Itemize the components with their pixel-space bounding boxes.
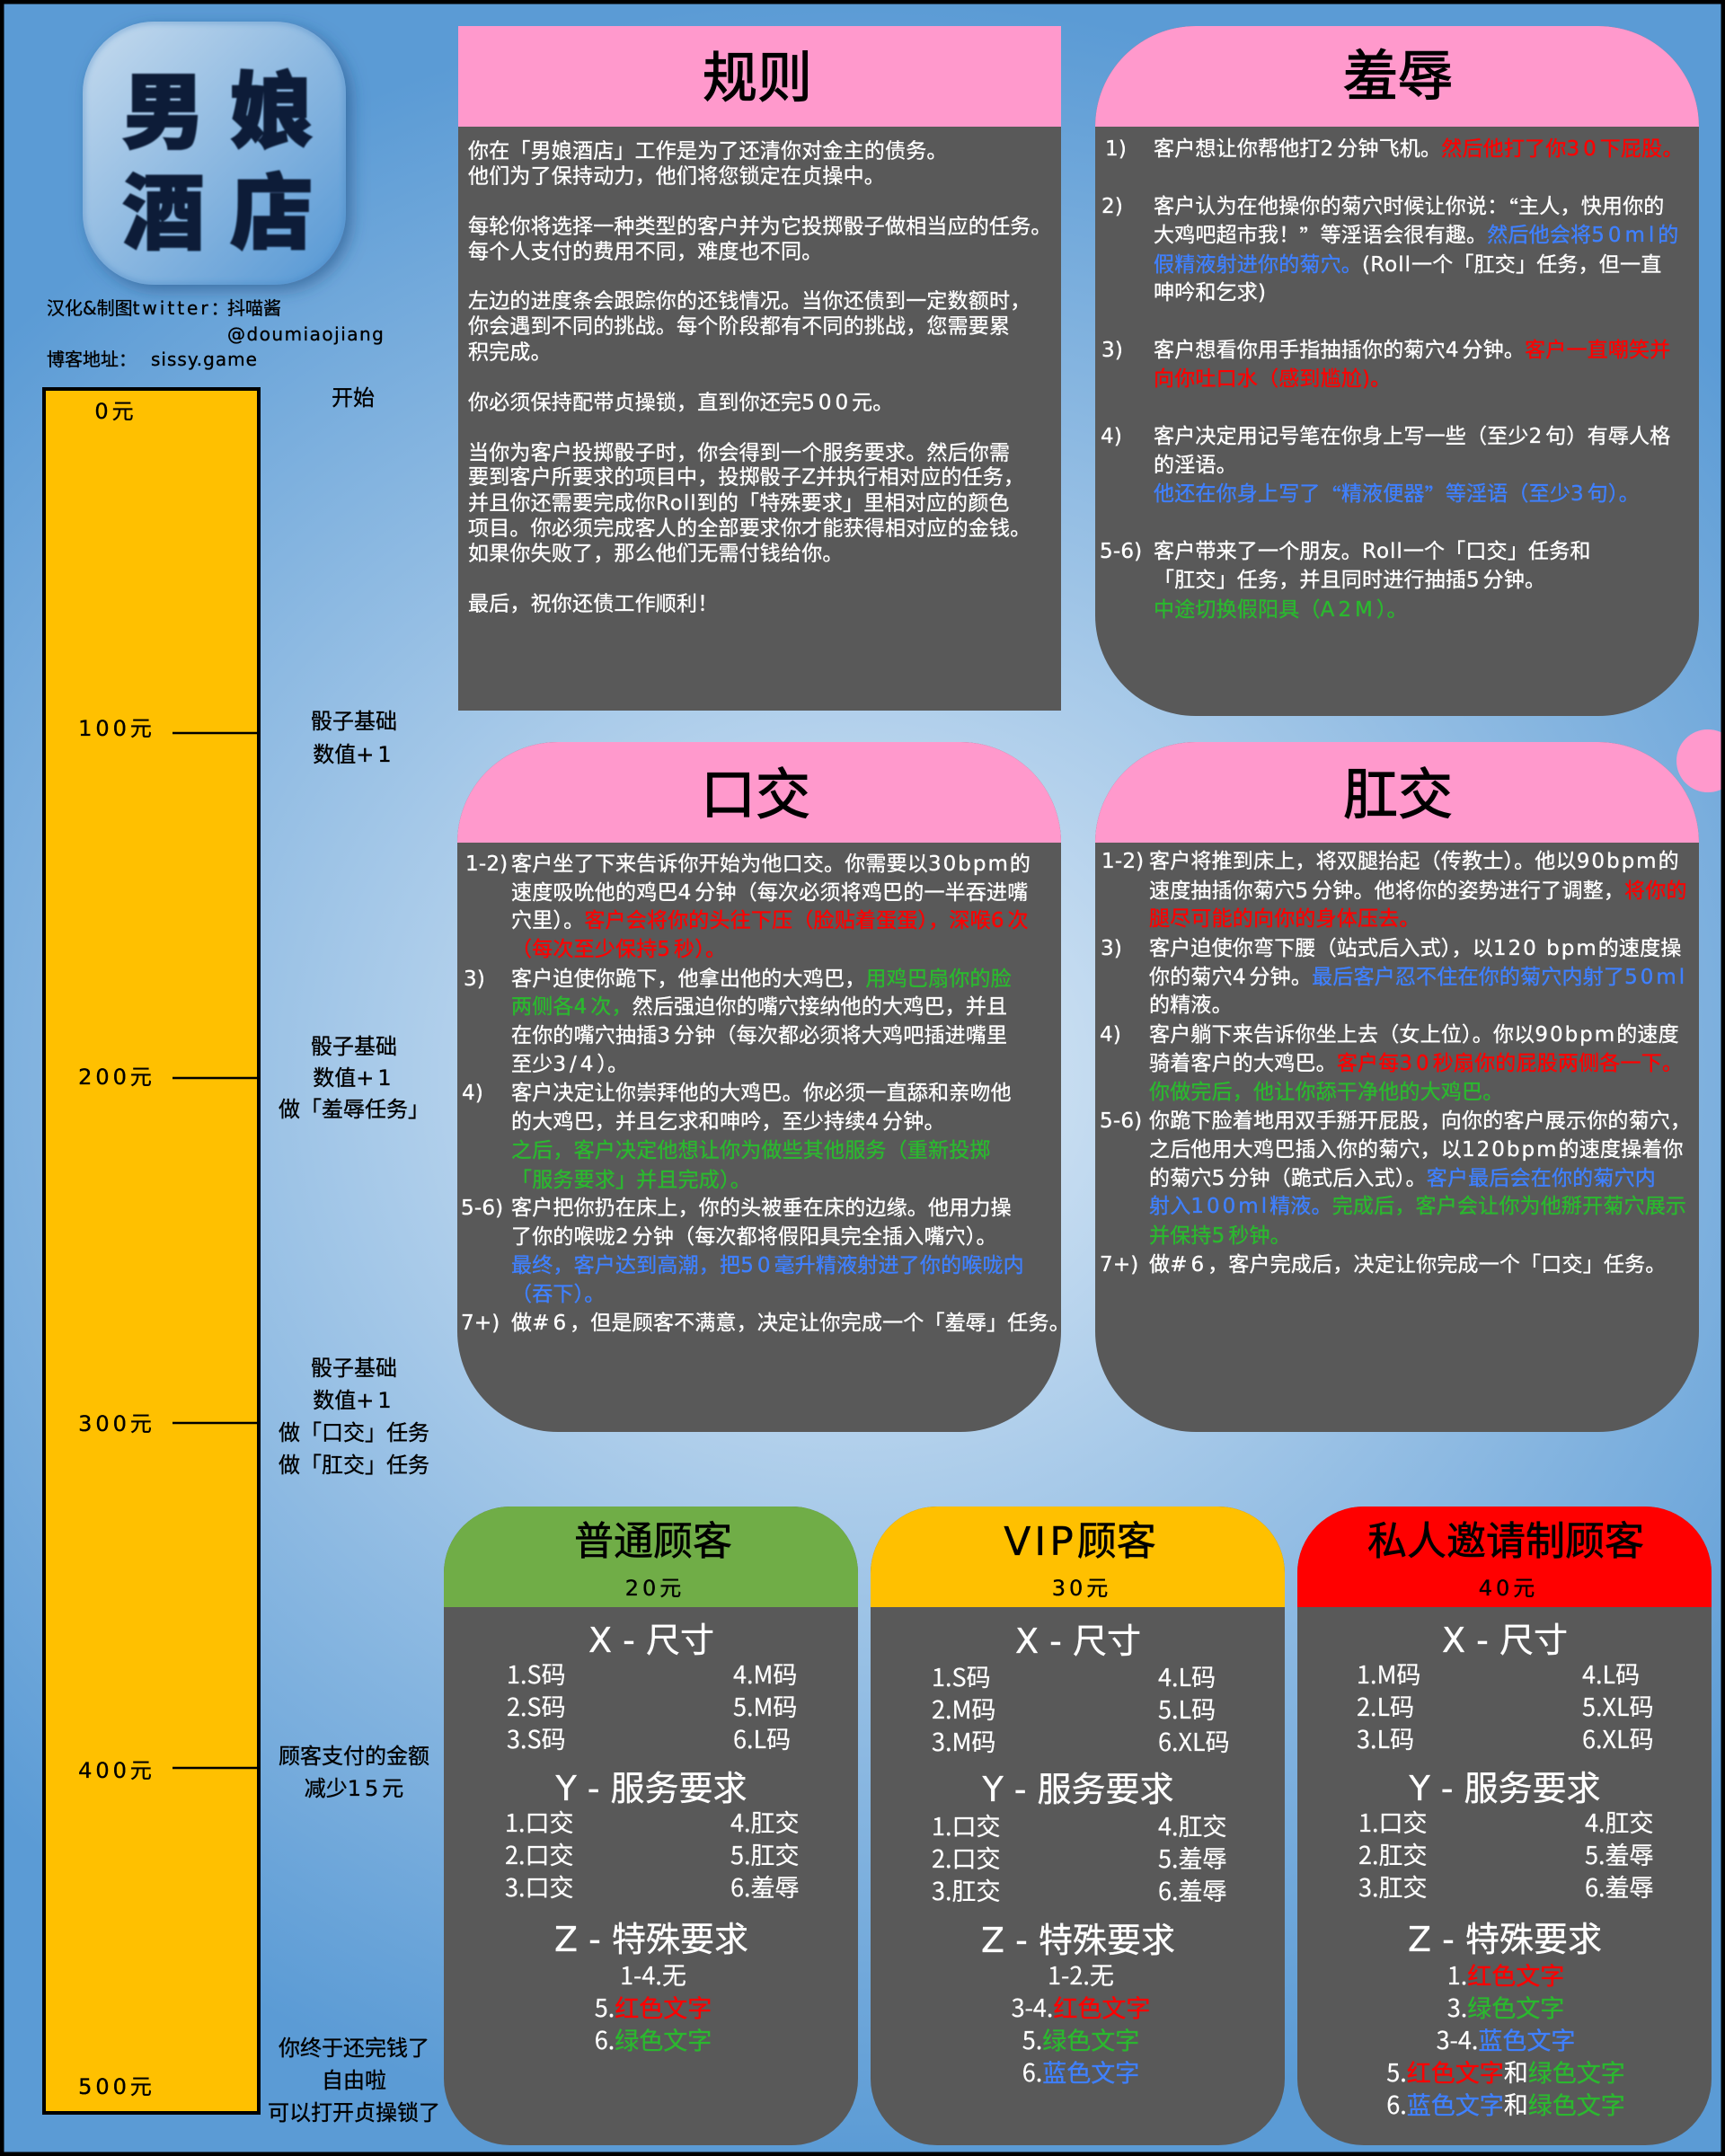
milestone: 300 [279, 1356, 429, 1478]
X size table: 4.L码 [1582, 1656, 1640, 1691]
X size table: 4.L码 [1158, 1658, 1216, 1693]
humiliation list: 假精液射进你的菊穴。(Roll一个「肛交」任务，但一直 [1154, 253, 1661, 277]
X size table: 5.L码 [1158, 1691, 1216, 1726]
credits: 汉化&制图twitter： [47, 297, 229, 319]
Y service table: 1.口交 [505, 1804, 573, 1839]
Y service table: 3.口交 [505, 1869, 573, 1904]
humiliation list: 客户想让你帮他打2分钟飞机。然后他打了你30下屁股。 [1154, 137, 1684, 161]
progress bar: 300元 [78, 1411, 152, 1436]
Y service table: 6.羞辱 [1158, 1872, 1227, 1907]
X size table: 2.S码 [507, 1688, 566, 1723]
anal list: 1-2) [1101, 850, 1144, 873]
X size table: 3.L码 [1357, 1720, 1414, 1755]
rules text: 并且你还需要完成你Roll到的「特殊要求」里相对应的颜色 [468, 492, 1010, 516]
milestone: 200 [279, 1034, 429, 1122]
X size table: 1.M码 [1357, 1656, 1420, 1691]
anal list: 做#6，客户完成后，决定让你完成一个「口交」任务。 [1149, 1253, 1667, 1277]
Z special table: 3-4.蓝色文字 [1437, 2021, 1575, 2056]
decorative pink circle [1676, 729, 1725, 792]
rules text: 每轮你将选择一种类型的客户并为它投掷骰子做相当应的任务。 [468, 216, 1052, 239]
progress bar: 200元 [78, 1065, 152, 1090]
X size table: X - 尺寸 [1442, 1621, 1568, 1660]
oral list: 最终，客户达到高潮，把50毫升精液射进了你的喉咙内 [511, 1254, 1024, 1277]
heading: private invitation customer: 私人邀请制顾客 [1367, 1518, 1644, 1565]
anal list: 客户将推到床上，将双腿抬起（传教士）。他以90bpm的 [1149, 850, 1679, 873]
milestone: 200: 做「羞辱任务」 [279, 1097, 429, 1122]
heading: anal: 肛交 [1343, 764, 1453, 826]
Y service table [932, 1770, 1227, 1907]
heading: regular customer: 普通顾客 [574, 1518, 732, 1565]
oral list: 3) [464, 968, 485, 991]
Y service table: 5.肛交 [730, 1836, 800, 1871]
panel: private invitation customer [1297, 1507, 1712, 2145]
oral list: 7+) [461, 1312, 500, 1335]
X size table: 6.XL码 [1158, 1723, 1230, 1758]
milestone: 500: 可以打开贞操锁了 [268, 2100, 440, 2125]
milestone: 500: 自由啦 [322, 2068, 386, 2093]
oral list: 客户迫使你跪下，他拿出他的大鸡巴，用鸡巴扇你的脸 [511, 967, 1012, 991]
oral list: 1-2) [465, 853, 508, 876]
humiliation list: 的淫语。 [1154, 454, 1237, 477]
price: 40: 40元 [1479, 1576, 1535, 1601]
logo: 男娘酒店: 店 [230, 147, 313, 266]
milestone: 500 [268, 2036, 440, 2125]
X size table: 3.M码 [932, 1723, 995, 1758]
rules text: 要到客户所要求的项目中，投掷骰子Z并执行相对应的任务， [468, 465, 1024, 489]
oral list: 的大鸡巴，并且乞求和呻吟，至少持续4分钟。 [511, 1110, 945, 1134]
Y service table: 2.口交 [505, 1836, 573, 1871]
rules text: 你必须保持配带贞操锁，直到你还完500元。 [468, 392, 894, 415]
X size table: 2.M码 [932, 1691, 995, 1726]
oral list: 5-6) [461, 1197, 503, 1220]
rules text: 每个人支付的费用不同，难度也不同。 [468, 241, 822, 264]
anal list: 骑着客户的大鸡巴。客户每30秒扇你的屁股两侧各一下。 [1149, 1052, 1683, 1075]
X size table: 5.M码 [733, 1688, 797, 1723]
anal list: 7+) [1100, 1253, 1138, 1277]
milestone: start: 开始 [332, 385, 375, 411]
anal list: 你做完后，他让你舔干净他的大鸡巴。 [1149, 1081, 1503, 1104]
price: 20: 20元 [625, 1576, 681, 1601]
oral list: （吞下）。 [511, 1283, 606, 1306]
humiliation list: 大鸡吧超市我！”等淫语会很有趣。然后他会将50ml的 [1154, 220, 1678, 251]
Y service table: 1.口交 [932, 1807, 1001, 1842]
heading: VIP customer: VIP顾客 [1004, 1518, 1156, 1565]
Z special table [1386, 1920, 1625, 2121]
Z special table [981, 1921, 1175, 2089]
anal list: 腿尽可能的向你的身体压去。 [1149, 907, 1420, 931]
milestone: 100 [311, 709, 397, 767]
panel: rules [458, 26, 1061, 711]
Z special table: 6.绿色文字 [595, 2021, 712, 2056]
anal list: 4) [1100, 1023, 1121, 1047]
Y service table: 4.肛交 [730, 1804, 800, 1839]
milestone: 300: 数值+1 [313, 1388, 395, 1413]
credits: 博客地址： [47, 349, 137, 370]
Y service table: 2.口交 [932, 1840, 1001, 1875]
humiliation list: 4) [1101, 425, 1122, 448]
logo: 男娘酒店: 娘 [230, 45, 313, 165]
Y service table [1358, 1769, 1653, 1904]
Z special table: 1.红色文字 [1447, 1957, 1564, 1992]
rules text: 左边的进度条会跟踪你的还钱情况。当你还债到一定数额时， [468, 289, 1031, 313]
anal list: 3) [1101, 937, 1122, 960]
humiliation list: 客户认为在他操你的菊穴时候让你说：“主人，快用你的 [1154, 191, 1665, 222]
logo: 男娘酒店: 男 [122, 47, 205, 165]
Z special table: 1-4.无 [620, 1957, 686, 1992]
progress bar: 0元 [94, 399, 134, 424]
rules text: 他们为了保持动力，他们将您锁定在贞操中。 [468, 165, 885, 189]
anal list: 之后他用大鸡巴插入你的菊穴，以120bpm的速度操着你 [1149, 1138, 1684, 1162]
Y service table: 4.肛交 [1158, 1807, 1227, 1842]
anal list: 的菊穴5分钟（跪式后入式）。客户最后会在你的菊穴内 [1149, 1167, 1656, 1190]
Z special table: 6.蓝色文字 [1022, 2054, 1139, 2089]
panel: oral [457, 742, 1070, 1432]
credits: @doumiaojiang [227, 323, 385, 345]
panel: humiliation [1095, 26, 1699, 716]
oral list: 做#6，但是顾客不满意，决定让你完成一个「羞辱」任务。 [511, 1312, 1070, 1335]
rules text: 最后，祝你还债工作顺利！ [468, 593, 718, 616]
humiliation list: 客户想看你用手指抽插你的菊穴4分钟。客户一直嘲笑并 [1154, 339, 1670, 362]
humiliation list: 向你吐口水（感到尴尬)。 [1154, 367, 1391, 391]
Y service table: 6.羞辱 [1585, 1869, 1653, 1904]
anal list: 并保持5秒钟。 [1149, 1224, 1291, 1248]
humiliation list: 呻吟和乞求) [1154, 281, 1266, 305]
Z special table: Z - 特殊要求 [554, 1920, 748, 1959]
credits [47, 297, 385, 370]
anal list [1100, 850, 1691, 1277]
Z special table: 5.红色文字和绿色文字 [1386, 2054, 1625, 2089]
Z special table: 5.绿色文字 [1022, 2021, 1139, 2056]
heading: humiliation: 羞辱 [1343, 45, 1453, 108]
Y service table: Y - 服务要求 [1408, 1769, 1601, 1808]
panel: regular customer [444, 1507, 858, 2145]
humiliation list: 客户带来了一个朋友。Roll一个「口交」任务和 [1154, 540, 1591, 563]
humiliation list: 2) [1101, 195, 1123, 218]
humiliation list: 中途切换假阳具（A2M）。 [1154, 598, 1408, 622]
logo: 男娘酒店: 酒 [122, 147, 205, 266]
oral list: 两侧各4次，然后强迫你的嘴穴接纳他的大鸡巴，并且 [511, 995, 1007, 1019]
oral list: 在你的嘴穴抽插3分钟（每次都必须将大鸡吧插进嘴里 [511, 1024, 1007, 1047]
milestone: 300: 做「肛交」任务 [279, 1453, 429, 1478]
Y service table [505, 1769, 800, 1904]
anal list: 5-6) [1100, 1109, 1142, 1133]
rules text: 积完成。 [468, 341, 552, 365]
rules text: 你在「男娘酒店」工作是为了还清你对金主的债务。 [468, 140, 948, 163]
price: 30: 30元 [1052, 1576, 1108, 1601]
credits: 抖喵酱 [227, 297, 281, 319]
oral list: 客户坐了下来告诉你开始为他口交。你需要以30bpm的 [511, 853, 1031, 876]
Z special table [554, 1920, 748, 2056]
rules text: 项目。你必须完成客人的全部要求你才能获得相对应的金钱。 [468, 517, 1031, 541]
Y service table: Y - 服务要求 [981, 1770, 1174, 1809]
milestone: 400 [279, 1744, 429, 1801]
oral list: 至少3/4）。 [511, 1053, 628, 1076]
oral list: 之后，客户决定他想让你为做些其他服务（重新投掷 [511, 1139, 991, 1162]
milestone: 400: 减少15元 [305, 1776, 403, 1801]
milestone: 200: 数值+1 [313, 1065, 395, 1091]
X size table: 1.S码 [932, 1658, 991, 1693]
rules text: 如果你失败了，那么他们无需付钱给你。 [468, 543, 844, 566]
oral list: 速度吸吮他的鸡巴4分钟（每次必须将鸡巴的一半吞进嘴 [511, 881, 1028, 905]
progress bar: 100元 [78, 716, 152, 741]
Z special table: Z - 特殊要求 [981, 1921, 1175, 1960]
progress bar: 400元 [78, 1758, 152, 1783]
Z special table: 3.绿色文字 [1447, 1989, 1564, 2024]
milestone: 200: 骰子基础 [311, 1034, 397, 1059]
Z special table: 5.红色文字 [595, 1989, 712, 2024]
Y service table: 6.羞辱 [730, 1869, 800, 1904]
Z special table: 3-4.红色文字 [1012, 1989, 1150, 2024]
humiliation list: 「肛交」任务，并且同时进行抽插5分钟。 [1154, 569, 1545, 592]
Y service table: 4.肛交 [1585, 1804, 1653, 1839]
rules text: 当你为客户投掷骰子时，你会得到一个服务要求。然后你需 [468, 442, 1010, 465]
Y service table: Y - 服务要求 [554, 1769, 748, 1808]
oral list: （每次至少保持5秒）。 [511, 938, 726, 961]
Z special table: 6.蓝色文字和绿色文字 [1386, 2086, 1625, 2121]
Y service table: 1.口交 [1358, 1804, 1427, 1839]
credits: sissy.game [151, 349, 258, 370]
Y service table: 3.肛交 [932, 1872, 1001, 1907]
progress bar [44, 389, 259, 2113]
X size table: X - 尺寸 [588, 1621, 714, 1660]
oral list: 4) [462, 1082, 483, 1105]
Y service table: 5.羞辱 [1158, 1840, 1227, 1875]
milestone: 300: 骰子基础 [311, 1356, 397, 1381]
oral list: 客户决定让你崇拜他的大鸡巴。你必须一直舔和亲吻他 [511, 1082, 1012, 1105]
X size table [1357, 1621, 1654, 1755]
oral list: 了你的喉咙2分钟（每次都将假阳具完全插入嘴穴）。 [511, 1225, 997, 1249]
humiliation list: 1) [1105, 137, 1127, 161]
oral list: 「服务要求」并且完成）。 [511, 1169, 751, 1192]
X size table: 6.XL码 [1582, 1720, 1654, 1755]
X size table: 6.L码 [733, 1720, 791, 1755]
milestone: 300: 做「口交」任务 [279, 1420, 429, 1445]
milestone: 500: 你终于还完钱了 [279, 2036, 429, 2061]
Z special table: Z - 特殊要求 [1408, 1920, 1602, 1959]
humiliation list: 客户决定用记号笔在你身上写一些（至少2句）有辱人格 [1154, 425, 1670, 448]
anal list: 射入100ml精液。完成后，客户会让你为他掰开菊穴展示 [1149, 1195, 1686, 1218]
anal list: 你的菊穴4分钟。最后客户忍不住在你的菊穴内射了50ml [1149, 966, 1687, 989]
X size table: 4.M码 [733, 1656, 797, 1691]
anal list: 客户迫使你弯下腰（站式后入式），以120 bpm的速度操 [1149, 937, 1682, 960]
oral list: 客户把你扔在床上，你的头被垂在床的边缘。他用力操 [511, 1197, 1012, 1220]
X size table: 1.S码 [507, 1656, 566, 1691]
Y service table: 3.肛交 [1358, 1869, 1427, 1904]
X size table: X - 尺寸 [1015, 1621, 1141, 1661]
humiliation list: 他还在你身上写了“精液便器”等淫语（至少3句）。 [1154, 479, 1640, 509]
X size table: 2.L码 [1357, 1688, 1414, 1723]
Y service table: 5.羞辱 [1585, 1836, 1653, 1871]
rules text [468, 140, 1052, 616]
Y service table: 2.肛交 [1358, 1836, 1427, 1871]
X size table: 5.XL码 [1582, 1688, 1654, 1723]
anal list: 你跪下脸着地用双手掰开屁股，向你的客户展示你的菊穴， [1149, 1109, 1691, 1133]
X size table [507, 1621, 797, 1755]
Z special table: 1-2.无 [1048, 1957, 1114, 1992]
oral list: 穴里）。客户会将你的头往下压（脸贴着蛋蛋），深喉6次 [511, 909, 1029, 932]
panel: anal [1095, 742, 1699, 1432]
anal list: 客户躺下来告诉你坐上去（女上位）。你以90bpm的速度 [1149, 1023, 1679, 1047]
logo: 男娘酒店 [83, 22, 346, 285]
panel: VIP customer [871, 1507, 1285, 2145]
oral list [461, 853, 1070, 1335]
X size table [932, 1621, 1230, 1758]
progress bar: 500元 [78, 2074, 152, 2099]
anal list: 速度抽插你菊穴5分钟。他将你的姿势进行了调整，将你的 [1149, 879, 1687, 903]
humiliation list [1100, 137, 1684, 622]
heading: rules: 规则 [703, 47, 812, 110]
milestone: 100: 骰子基础 [311, 709, 397, 734]
heading: oral: 口交 [701, 764, 810, 826]
humiliation list: 3) [1101, 339, 1123, 362]
X size table: 3.S码 [507, 1720, 566, 1755]
rules text: 你会遇到不同的挑战。每个阶段都有不同的挑战，您需要累 [468, 314, 1010, 338]
milestone: 400: 顾客支付的金额 [279, 1744, 429, 1769]
milestone: 100: 数值+1 [313, 742, 395, 767]
humiliation list: 5-6) [1100, 540, 1142, 563]
anal list: 的精液。 [1149, 994, 1233, 1017]
